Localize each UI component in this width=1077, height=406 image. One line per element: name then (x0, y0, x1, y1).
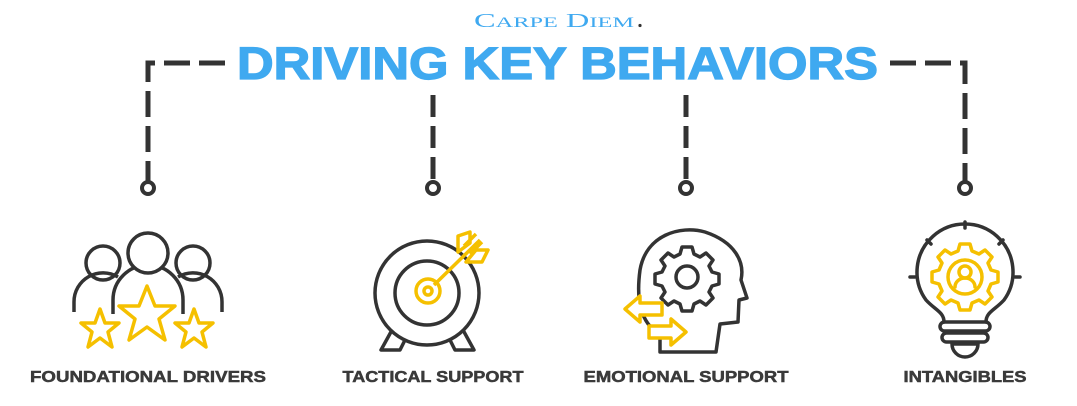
label: tactical support: TACTICAL SUPPORT (342, 369, 524, 386)
label: emotional support: EMOTIONAL SUPPORT (584, 369, 789, 386)
icon: target with arrow (375, 232, 488, 350)
title: DRIVING KEY BEHAVIORS (237, 38, 878, 89)
connector: third (680, 95, 692, 194)
connector: right (890, 63, 971, 194)
icon: light bulb with gear (910, 222, 1020, 357)
label: foundational drivers: FOUNDATIONAL DRIVERS (30, 369, 266, 386)
connector: left (142, 63, 225, 194)
label: intangibles: INTANGIBLES (904, 369, 1026, 386)
brand logo: C ARPE D IEM (474, 10, 634, 32)
icon: people with stars (74, 233, 222, 347)
icon: head with gear and arrows (625, 230, 747, 352)
connector: second (427, 95, 439, 194)
